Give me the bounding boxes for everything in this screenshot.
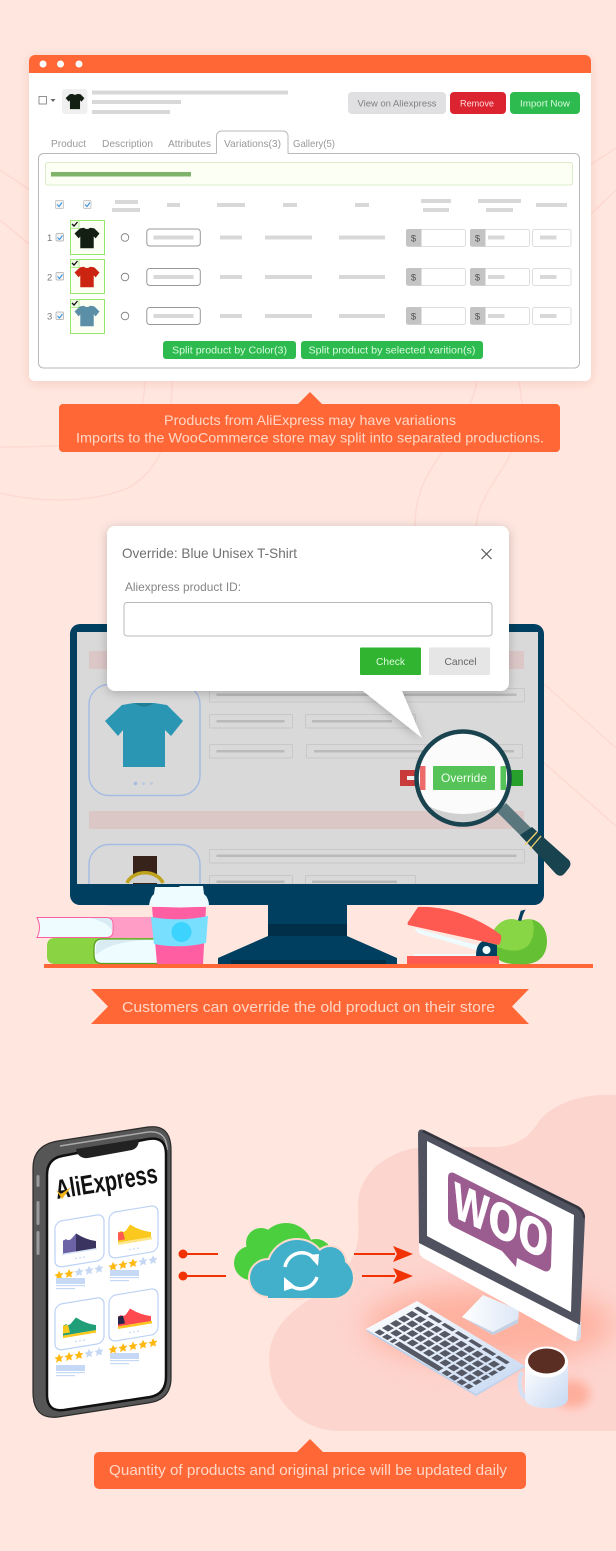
variation row 1: 1 xyxy=(47,233,52,244)
coffee cup xyxy=(149,886,209,964)
variation row 3: $ xyxy=(475,312,481,322)
variation row 2: 2 xyxy=(47,272,52,284)
field label: Aliexpress product ID: xyxy=(125,580,241,594)
variation row 2: $ xyxy=(475,272,481,284)
variation row 1: $ xyxy=(475,234,481,244)
banner: override xyxy=(91,989,529,1024)
green cloud xyxy=(234,1223,332,1280)
background curved lines xyxy=(0,148,616,826)
button: remove xyxy=(450,92,506,114)
card: purple shoe xyxy=(55,1214,104,1268)
blue cloud xyxy=(250,1240,353,1298)
desk line xyxy=(44,964,593,968)
tabs panel xyxy=(38,131,580,368)
blue cloud outline xyxy=(250,1240,353,1298)
phone notch xyxy=(76,1139,139,1158)
text placeholder bars xyxy=(56,1270,139,1376)
stapler xyxy=(407,907,501,964)
monitor chin xyxy=(419,1240,581,1341)
button: check: Check xyxy=(376,656,406,668)
keyboard xyxy=(366,1301,525,1396)
button: remove: Remove xyxy=(460,98,494,110)
phone body xyxy=(33,1127,171,1417)
connector dots xyxy=(178,1250,226,1280)
monitor bezel xyxy=(418,1130,585,1325)
card: yellow shoe xyxy=(109,1205,158,1259)
apple xyxy=(490,910,547,964)
callout: variations: Imports to the WooCommerce store may split into separated productions. xyxy=(76,430,544,446)
desk shadows xyxy=(365,1287,615,1408)
AliExpress logo xyxy=(53,1159,160,1205)
variation row 1 xyxy=(47,220,571,254)
magnifying glass xyxy=(416,732,570,876)
override dialog xyxy=(107,526,509,738)
product fields xyxy=(210,688,524,889)
button: cancel: Cancel xyxy=(444,656,476,668)
tabs panel: Gallery(5) xyxy=(293,138,335,150)
callout: variations: Products from AliExpress may have variations xyxy=(164,412,456,428)
panel: import window xyxy=(29,55,591,381)
icon: sync cloud xyxy=(234,1223,353,1298)
window body xyxy=(29,55,591,381)
variation row 3: 3 xyxy=(47,312,52,322)
product cards xyxy=(54,1205,158,1363)
phone screen xyxy=(47,1139,166,1410)
magnifier handle xyxy=(497,803,570,876)
button: green on screen xyxy=(500,770,523,786)
arrows to desktop xyxy=(354,1246,413,1284)
tabs panel: Variations(3) xyxy=(224,138,281,150)
magnifier lens xyxy=(416,732,510,824)
variation row 3 xyxy=(47,300,571,334)
monitor screen content xyxy=(77,632,538,904)
button: import now: Import Now xyxy=(520,98,570,110)
green book xyxy=(47,938,165,964)
pink book xyxy=(37,917,155,938)
variation row 2: $ xyxy=(411,272,417,284)
card: green shoe xyxy=(55,1297,104,1351)
button: split by color: Split product by Color(3) xyxy=(172,346,287,356)
variation row 2 xyxy=(47,260,571,294)
Woo logo: Woo xyxy=(451,1157,552,1275)
books xyxy=(37,917,165,964)
button: split by color xyxy=(163,341,296,359)
table header xyxy=(56,199,567,212)
phone with AliExpress xyxy=(33,1127,171,1417)
magnifier ring xyxy=(416,732,510,824)
sync arrows xyxy=(284,1253,319,1291)
product header xyxy=(39,89,288,114)
callout: daily update: Quantity of products and original price will be updated daily xyxy=(109,1463,508,1479)
star ratings xyxy=(54,1254,158,1363)
button: red minus on screen xyxy=(400,770,426,786)
coffee mug xyxy=(520,1346,568,1408)
tabs panel: Attributes xyxy=(168,138,211,150)
variation row 3: $ xyxy=(411,312,417,322)
monitor screen xyxy=(427,1141,574,1312)
desktop computer with Woo xyxy=(366,1130,585,1408)
callout: variations xyxy=(59,392,560,452)
button: view on aliexpress xyxy=(348,92,446,114)
monitor illustration xyxy=(70,624,544,964)
card: red shoe xyxy=(109,1288,158,1342)
button: view on aliexpress: View on Aliexpress xyxy=(358,98,437,110)
button: check xyxy=(360,648,421,675)
button: cancel xyxy=(429,648,490,675)
dialog title: Override: Blue Unisex T-Shirt xyxy=(122,545,297,561)
callout: daily update xyxy=(94,1439,526,1489)
monitor bezel xyxy=(70,624,544,905)
window title bar xyxy=(29,55,591,73)
background blob xyxy=(269,1095,616,1431)
product card: blue shirt xyxy=(89,684,200,796)
notice bar xyxy=(46,162,572,185)
variation row 1: $ xyxy=(411,234,417,244)
icon: close xyxy=(482,549,492,559)
tabs panel: Product xyxy=(51,138,86,150)
monitor stand xyxy=(218,900,397,964)
tabs panel: Description xyxy=(102,138,153,150)
id input xyxy=(124,602,492,636)
button: split by selected variation xyxy=(301,341,483,359)
button: override xyxy=(433,766,495,790)
banner: override: Customers can override the old product on their store xyxy=(122,999,495,1016)
button: override: Override xyxy=(441,771,487,785)
monitor stand xyxy=(462,1295,519,1335)
AliExpress logo: AliExpress xyxy=(53,1159,160,1205)
button: import now xyxy=(510,92,580,114)
product card: second item xyxy=(89,844,200,904)
button: split by selected variation: Split product by selected varition(s) xyxy=(308,346,476,356)
